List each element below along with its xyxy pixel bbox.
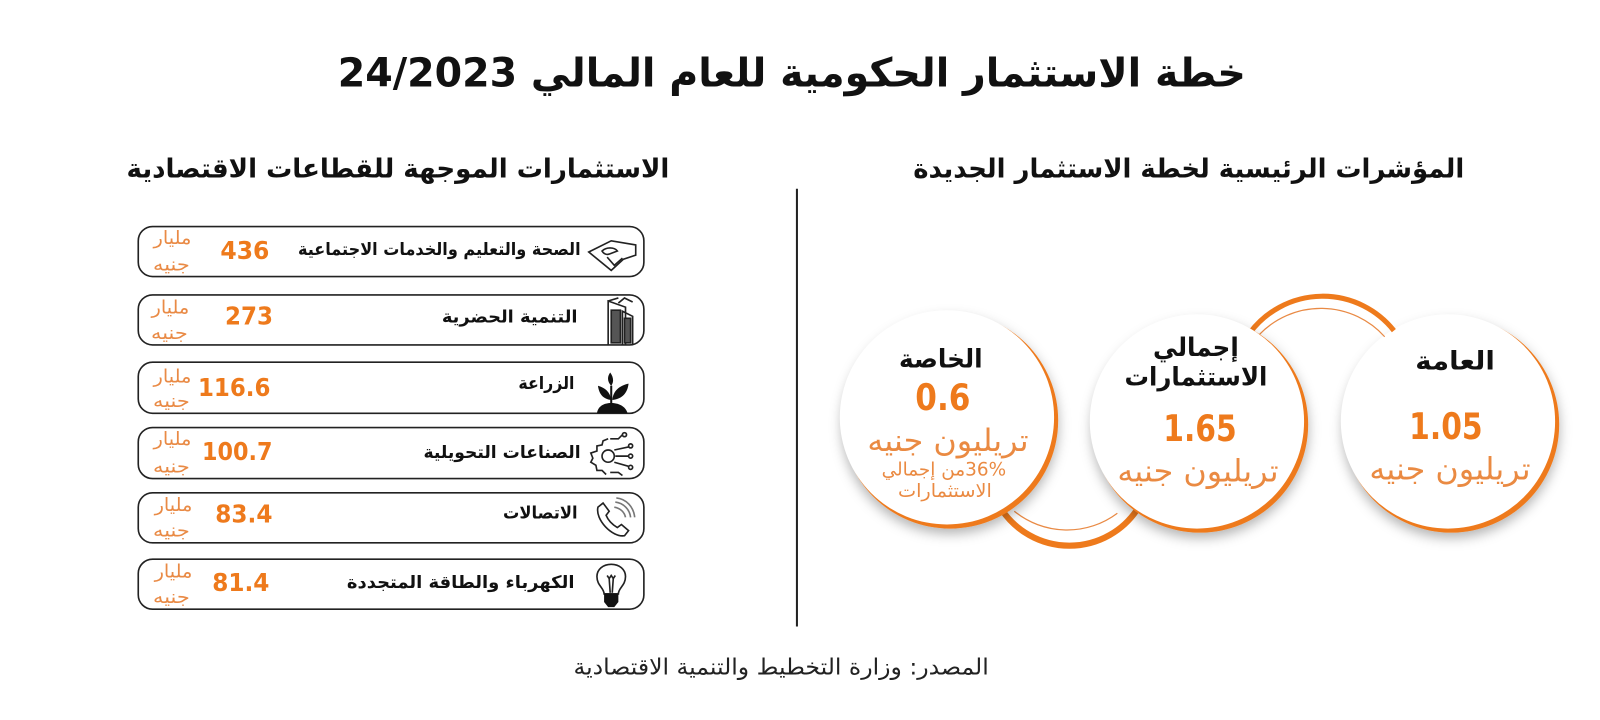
circle: private: الخاصة bbox=[899, 344, 983, 374]
row: manufacturing: الصناعات التحويلية bbox=[423, 443, 581, 463]
row: electricity and energy: الكهرباء والطاقة المتجددة bbox=[347, 573, 574, 593]
icon: gear circuit bbox=[591, 433, 633, 476]
icon: plant bbox=[597, 372, 629, 413]
icon: hand with cap bbox=[589, 241, 636, 270]
circle: total: إجمالي bbox=[1153, 333, 1239, 363]
row: electricity and energy: مليار bbox=[154, 562, 192, 583]
row: agriculture: جنيه bbox=[153, 391, 190, 412]
source note: المصدر: وزارة التخطيط والتنمية الاقتصادية bbox=[573, 654, 989, 680]
row: communications: مليار bbox=[154, 495, 192, 516]
panel: sector rows bbox=[138, 227, 644, 609]
circle: public bbox=[1341, 314, 1559, 533]
row: communications bbox=[138, 493, 644, 543]
title: خطة الاستثمار الحكومية للعام المالي 24/2023 bbox=[338, 51, 1246, 97]
row: agriculture: الزراعة bbox=[518, 374, 574, 394]
vertical divider bbox=[796, 189, 798, 627]
circle: total: تريليون جنيه bbox=[1117, 455, 1279, 490]
circle: private: الاستثمارات bbox=[898, 481, 992, 502]
row: health and education: الصحة والتعليم والخدمات الاجتماعية bbox=[298, 240, 581, 260]
circle: public: تريليون جنيه bbox=[1369, 453, 1531, 488]
row: electricity and energy bbox=[138, 559, 644, 609]
circle: total: 1.65 bbox=[1163, 407, 1237, 450]
row: electricity and energy: جنيه bbox=[153, 587, 190, 608]
row: urban development bbox=[138, 295, 644, 345]
row: health and education: مليار bbox=[153, 228, 191, 249]
row: electricity and energy: 81.4 bbox=[212, 568, 269, 597]
circle: total bbox=[1090, 314, 1308, 533]
row: agriculture: 116.6 bbox=[198, 373, 270, 402]
row: agriculture: مليار bbox=[153, 367, 191, 388]
circle: public: 1.05 bbox=[1409, 405, 1483, 448]
arc: bottom connector bbox=[1002, 510, 1137, 546]
heading: key indicators: المؤشرات الرئيسية لخطة الاستثمار الجديدة bbox=[913, 154, 1464, 185]
row: health and education: 436 bbox=[220, 236, 269, 265]
circle: private: تريليون جنيه bbox=[867, 424, 1029, 459]
icon: light bulb bbox=[597, 564, 626, 607]
row: urban development: جنيه bbox=[151, 323, 188, 344]
circle: private: 36%من إجمالي bbox=[882, 460, 1006, 481]
row: communications: 83.4 bbox=[215, 499, 272, 528]
row: health and education: جنيه bbox=[153, 254, 190, 275]
icon: phone bbox=[598, 498, 635, 536]
heading: economic sectors: الاستثمارات الموجهة للقطاعات الاقتصادية bbox=[127, 154, 669, 185]
circle: public: العامة bbox=[1415, 346, 1495, 376]
row: urban development: 273 bbox=[225, 301, 273, 330]
row: health and education bbox=[138, 227, 644, 277]
row: urban development: مليار bbox=[150, 297, 189, 318]
arc: top connector bbox=[1250, 296, 1394, 337]
panel: key indicators circles bbox=[840, 296, 1559, 546]
row: urban development: التنمية الحضرية bbox=[442, 307, 578, 327]
icon: buildings bbox=[608, 298, 633, 345]
circle: total: الاستثمارات bbox=[1124, 363, 1267, 393]
row: manufacturing: جنيه bbox=[153, 456, 190, 477]
row: communications: الاتصالات bbox=[503, 503, 578, 523]
row: agriculture bbox=[138, 362, 644, 413]
row: manufacturing bbox=[138, 428, 644, 479]
row: manufacturing: 100.7 bbox=[202, 437, 272, 466]
circle: private bbox=[840, 310, 1058, 529]
row: communications: جنيه bbox=[153, 521, 190, 542]
circle: private: 0.6 bbox=[915, 376, 970, 419]
row: manufacturing: مليار bbox=[153, 429, 191, 450]
